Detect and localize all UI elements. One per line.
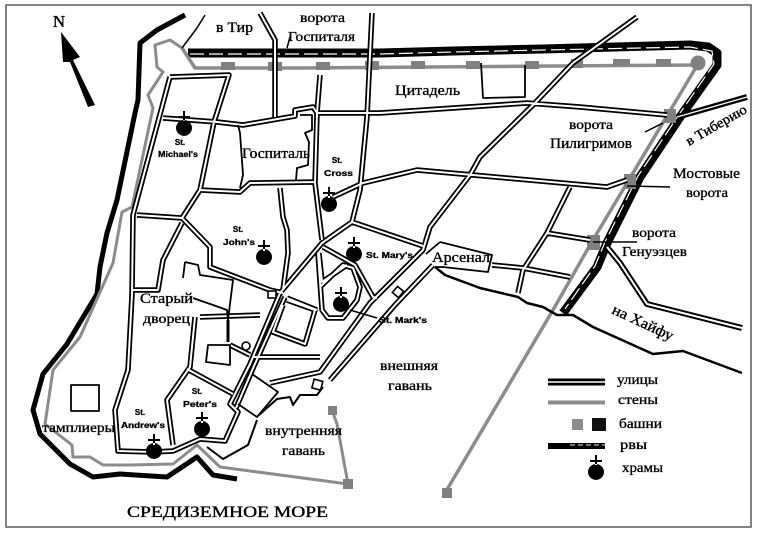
legend: walls: стены — [618, 393, 659, 408]
place names: тамплиеры — [42, 421, 116, 436]
place names: ворота — [300, 11, 346, 26]
place names: Пилигримов — [550, 136, 632, 152]
church labels: St. — [233, 225, 243, 234]
place names: ворота — [569, 118, 614, 133]
place names: гавань — [388, 379, 432, 394]
church: St. John's — [256, 240, 272, 265]
place names: дворец — [143, 312, 191, 327]
buildings and thin outlines — [71, 15, 670, 459]
white gate towers on harbor road — [242, 286, 404, 390]
place names: Госпиталя — [288, 30, 356, 45]
place names: на Хайфу — [609, 302, 676, 345]
place names: ворота — [686, 186, 729, 201]
church labels: John's — [223, 238, 256, 247]
north arrow — [53, 12, 95, 107]
place names: Цитадель — [395, 83, 460, 99]
church labels: Peter's — [183, 400, 218, 409]
towers — [221, 56, 706, 498]
legend: streets: улицы — [617, 373, 659, 388]
place names: ворота — [632, 226, 677, 241]
legend: moats: рвы — [620, 438, 648, 453]
church labels: Michael's — [158, 150, 199, 159]
place names: Госпиталь — [242, 146, 310, 162]
streets — [115, 13, 667, 452]
place names: внутренняя — [265, 424, 343, 439]
place names: СРЕДИЗЕМНОЕ МОРЕ — [127, 504, 328, 521]
church labels: St. — [192, 387, 202, 396]
church: St. Mark's — [333, 287, 349, 312]
church labels: St. — [332, 156, 342, 165]
place names: в Тир — [216, 20, 253, 36]
church labels: St. Mark's — [379, 316, 428, 325]
moats — [33, 15, 717, 479]
place names: в Тиберию — [684, 102, 750, 149]
road to Tiberias — [677, 97, 747, 117]
place names: внешняя — [380, 359, 439, 374]
road to Haifa and coastline — [435, 247, 742, 373]
city walls — [45, 40, 698, 493]
church labels: St. — [135, 408, 145, 417]
north arrow: N — [53, 12, 65, 31]
churches — [146, 111, 362, 459]
place names: Мостовые — [673, 166, 740, 182]
church: St. Michael's — [176, 111, 192, 136]
church: St. Andrew's — [146, 434, 162, 459]
church labels: Cross — [324, 169, 354, 178]
legend: churches: храмы — [622, 461, 664, 476]
church: St. Peter's — [194, 412, 210, 437]
church labels: St. — [175, 138, 185, 147]
place names: Старый — [140, 291, 193, 307]
legend: towers: башни — [619, 417, 663, 432]
church: St. Cross — [321, 187, 337, 212]
place names: Арсенал — [432, 250, 491, 266]
legend — [548, 373, 664, 480]
church labels: Andrew's — [121, 421, 166, 430]
church labels: St. Mary's — [366, 251, 414, 260]
place names: Генуэзцев — [622, 245, 687, 260]
church labels — [121, 138, 428, 430]
place names: гавань — [282, 444, 325, 459]
church: St. Mary's — [346, 237, 362, 262]
